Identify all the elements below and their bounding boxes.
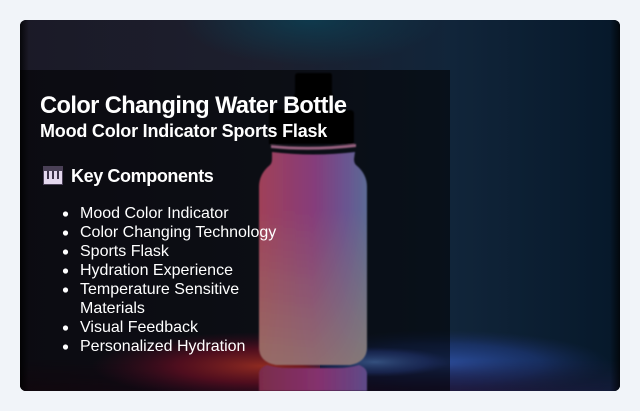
list item: Materials — [80, 300, 145, 317]
list item: Visual Feedback — [80, 319, 198, 336]
glow: red floor light — [20, 320, 320, 391]
bottle reflection — [259, 365, 367, 391]
subtitle: Mood Color Indicator Sports Flask — [40, 121, 327, 141]
panel: dark text backdrop — [20, 70, 450, 391]
bottle rim — [271, 144, 356, 150]
heading text: Key Components — [71, 166, 213, 186]
bottle body — [259, 152, 367, 365]
list item: Color Changing Technology — [80, 224, 276, 241]
heading: key components — [43, 166, 213, 186]
glow: blue floor light — [300, 340, 450, 385]
list item: Sports Flask — [80, 243, 169, 260]
list item: Mood Color Indicator — [80, 205, 229, 222]
list item — [80, 281, 239, 317]
bottle cap — [269, 73, 354, 144]
list item: Hydration Experience — [80, 262, 233, 279]
bullets — [62, 211, 68, 350]
list item: Temperature Sensitive — [80, 281, 239, 298]
bottle — [259, 73, 367, 391]
list: key components — [62, 205, 276, 355]
icon: piano keys — [43, 166, 63, 185]
title: Color Changing Water Bottle — [40, 93, 346, 119]
list item: Personalized Hydration — [80, 338, 245, 355]
